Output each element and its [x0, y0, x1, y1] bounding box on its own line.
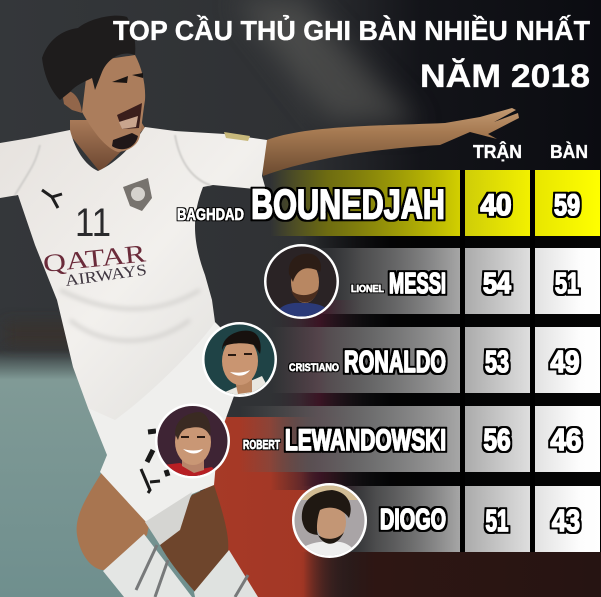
portrait: Ronaldo	[202, 322, 277, 397]
shirt sponsor: AIRWAYS	[64, 262, 148, 290]
row: Messi: 51	[555, 268, 579, 300]
column header: Trận: TRẬN	[473, 141, 522, 162]
row: Bounedjah: 59	[554, 189, 580, 222]
portrait: Messi	[264, 244, 339, 319]
shirt sponsor: QATAR	[42, 240, 147, 278]
row: Lewandowski: 46	[550, 422, 582, 457]
shirt number 11: 11	[75, 201, 111, 245]
player hair	[42, 16, 135, 100]
row: Lewandowski	[240, 406, 600, 472]
row: Messi	[320, 248, 600, 314]
row: Bounedjah: BOUNEDJAH	[251, 180, 445, 228]
player legs	[77, 472, 228, 592]
row: Diogo: 51	[486, 503, 508, 538]
title	[113, 14, 590, 94]
row: Bounedjah	[177, 170, 600, 236]
row: Messi: LIONEL	[351, 283, 385, 295]
player forearm	[262, 108, 519, 176]
title: NĂM 2018	[420, 58, 590, 94]
player shirt	[0, 127, 267, 420]
row: Messi: 54	[483, 268, 511, 300]
shirt sponsor	[42, 240, 148, 290]
row: Ronaldo: 49	[550, 344, 580, 379]
column header: Bàn: BÀN	[550, 141, 588, 162]
title: TOP CẦU THỦ GHI BÀN NHIỀU NHẤT	[113, 14, 590, 46]
row: Diogo: 43	[552, 503, 580, 538]
row: Ronaldo	[270, 327, 600, 393]
sleeve badge	[224, 132, 250, 141]
row: Ronaldo: RONALDO	[344, 344, 446, 379]
player neck	[70, 120, 145, 172]
row: Bounedjah: BAGHDAD	[177, 205, 244, 224]
row: Lewandowski: LEWANDOWSKI	[285, 424, 446, 457]
portrait: Diogo	[292, 483, 367, 558]
puma logo	[42, 190, 62, 208]
row: Diogo: DIOGO	[380, 504, 446, 536]
row: Lewandowski: 56	[484, 422, 510, 457]
player head	[62, 55, 145, 152]
row: Ronaldo: CRISTIANO	[289, 362, 339, 374]
club crest	[123, 178, 152, 211]
player socks	[103, 534, 258, 597]
player shorts	[88, 322, 238, 545]
row: Bounedjah: 40	[480, 189, 512, 222]
portrait: Lewandowski	[155, 404, 230, 478]
row: Messi: MESSI	[389, 268, 446, 300]
black strips between rows	[300, 170, 601, 552]
row: Ronaldo: 53	[485, 344, 509, 379]
row: Lewandowski: ROBERT	[243, 437, 280, 452]
row: Diogo	[340, 486, 600, 552]
